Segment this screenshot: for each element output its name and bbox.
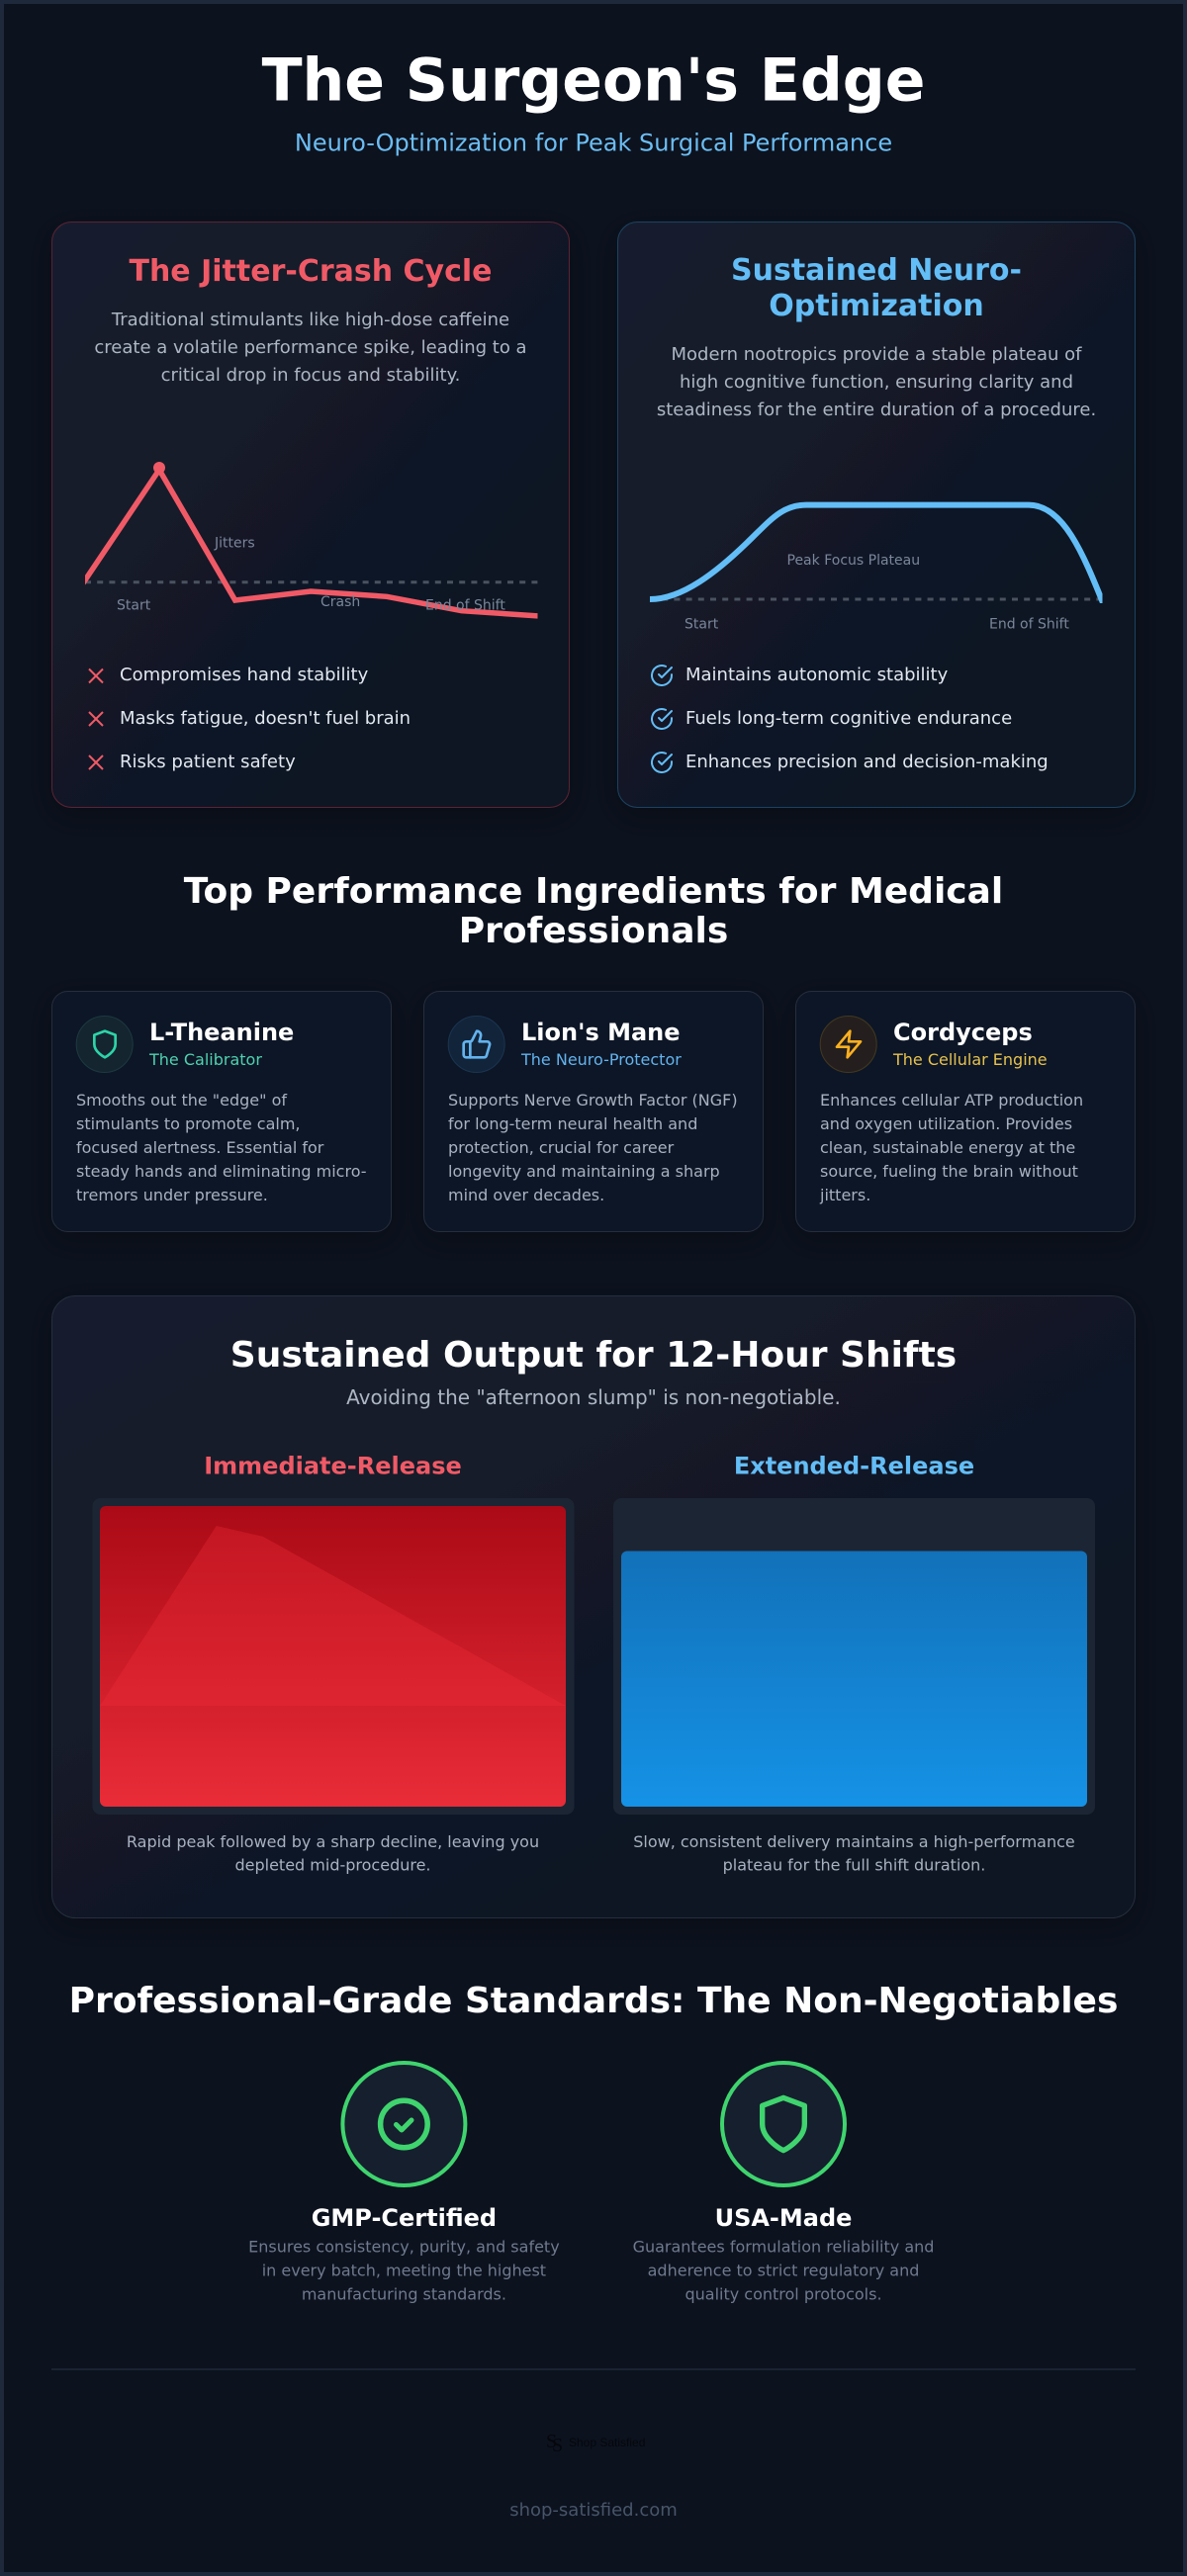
label: the cellular engine: The Cellular Engine xyxy=(892,1050,1048,1069)
panel: jitter-crash cycle xyxy=(51,222,570,807)
chart: sustained plateau curve: End of Shift xyxy=(989,617,1069,633)
label: immediate-release: Immediate-Release xyxy=(204,1452,462,1479)
label: the calibrator: The Calibrator xyxy=(148,1050,262,1069)
column: extended-release xyxy=(613,1452,1095,1875)
text: sustained description xyxy=(657,344,1096,420)
text: Lion's Mane description xyxy=(448,1091,738,1204)
logo: Shop Satisfied xyxy=(546,2431,645,2456)
chart: jitter-crash line: Jitters xyxy=(214,535,255,551)
list: jitter-crash drawbacks: Masks fatigue, doesn't fuel brain xyxy=(120,708,411,729)
text: Cordyceps description: and oxygen utilization. Provides xyxy=(820,1114,1072,1133)
text: Lion's Mane description: longevity and maintaining a sharp xyxy=(448,1162,720,1181)
heading: professional-grade standards: Professional-Grade Standards: The Non-Negotiables xyxy=(69,1981,1118,2021)
caption: extended-release xyxy=(633,1832,1075,1875)
heading: sustained neuro-optimization: Sustained Neuro- xyxy=(731,253,1022,288)
list: sustained benefits: Fuels long-term cognitive endurance xyxy=(685,708,1012,729)
label: Cordyceps: Cordyceps xyxy=(893,1019,1033,1046)
text: jitter-crash description: create a volatile performance spike, leading to a xyxy=(94,337,527,358)
heading: sustained output: Sustained Output for 12-Hour Shifts xyxy=(230,1335,957,1376)
text: L-Theanine description: stimulants to promote calm, xyxy=(76,1114,300,1133)
badge: GMP-Certified xyxy=(248,2063,560,2304)
text: GMP description: Ensures consistency, purity, and safety xyxy=(248,2237,560,2257)
text: L-Theanine description: Smooths out the "edge" of xyxy=(76,1091,287,1110)
text: USA-Made description: Guarantees formulation reliability and xyxy=(633,2237,934,2257)
list: sustained benefits: Maintains autonomic stability xyxy=(685,665,949,685)
heading: jitter-crash cycle: The Jitter-Crash Cycle xyxy=(129,254,493,289)
card: Cordyceps xyxy=(795,991,1136,1232)
logo: Shop Satisfied: S xyxy=(546,2431,557,2452)
icon: shield badge xyxy=(722,2063,845,2185)
list: jitter-crash drawbacks: Risks patient safety xyxy=(120,752,296,772)
chart: jitter-crash line xyxy=(79,462,544,616)
footer url: shop-satisfied.com xyxy=(509,2500,678,2521)
chart: jitter-crash line: Crash xyxy=(320,594,360,610)
text: USA-Made description: quality control protocols. xyxy=(685,2284,882,2304)
panel: sustained output xyxy=(51,1295,1136,1918)
text: sustained description: high cognitive function, ensuring clarity and xyxy=(680,372,1073,393)
icon: shield xyxy=(76,1017,133,1072)
caption: immediate-release: Rapid peak followed by a sharp decline, leaving you xyxy=(127,1832,539,1851)
heading: sustained neuro-optimization xyxy=(731,253,1022,323)
text: L-Theanine description: focused alertness. Essential for xyxy=(76,1138,324,1157)
text: L-Theanine description: tremors under pressure. xyxy=(76,1186,268,1204)
label: Lion's Mane: Lion's Mane xyxy=(521,1019,681,1046)
icon: lightning bolt xyxy=(820,1017,876,1072)
text: Lion's Mane description: Supports Nerve Growth Factor (NGF) xyxy=(448,1091,738,1110)
list: sustained benefits xyxy=(652,665,1049,772)
caption: immediate-release: depleted mid-procedure. xyxy=(234,1855,431,1875)
text: Cordyceps description: clean, sustainable energy at the xyxy=(820,1138,1075,1157)
heading: top performance ingredients: Professionals xyxy=(459,911,728,951)
text: Cordyceps description xyxy=(819,1091,1083,1204)
chart: jitter-crash line: End of Shift xyxy=(425,598,505,614)
icon: thumbs up xyxy=(448,1017,504,1072)
icon: check badge xyxy=(342,2063,465,2185)
caption: extended-release: plateau for the full shift duration. xyxy=(723,1855,985,1875)
panel: sustained neuro-optimization xyxy=(617,222,1136,807)
list: sustained benefits: Enhances precision and decision-making xyxy=(685,752,1049,772)
list: jitter-crash drawbacks xyxy=(89,665,411,772)
label: extended-release: Extended-Release xyxy=(734,1452,974,1479)
text: USA-Made description xyxy=(633,2237,934,2304)
heading: top performance ingredients xyxy=(184,871,1003,951)
heading: sustained neuro-optimization: Optimization xyxy=(769,289,984,323)
text: GMP description xyxy=(248,2237,560,2304)
list: jitter-crash drawbacks: Compromises hand stability xyxy=(120,665,369,685)
label: USA-Made: USA-Made xyxy=(715,2204,852,2232)
heading: top performance ingredients: Top Performance Ingredients for Medical xyxy=(184,871,1003,912)
card: L-Theanine xyxy=(51,991,392,1232)
text: jitter-crash description: Traditional stimulants like high-dose caffeine xyxy=(111,310,509,330)
subheading: afternoon slump: Avoiding the "afternoon slump" is non-negotiable. xyxy=(346,1385,841,1409)
text: Cordyceps description: jitters. xyxy=(819,1186,870,1204)
text: jitter-crash description xyxy=(94,310,527,386)
text: Lion's Mane description: mind over decades. xyxy=(448,1186,604,1204)
card: Lion's Mane xyxy=(423,991,764,1232)
text: USA-Made description: adherence to strict regulatory and xyxy=(648,2261,919,2280)
text: GMP description: manufacturing standards. xyxy=(302,2284,506,2304)
text: L-Theanine description xyxy=(76,1091,367,1204)
text: Lion's Mane description: for long-term neural health and xyxy=(448,1114,697,1133)
text: Cordyceps description: source, fueling the brain without xyxy=(820,1162,1078,1181)
column: immediate-release xyxy=(93,1452,574,1875)
chart: sustained plateau curve: Start xyxy=(685,617,719,633)
chart: extended-release bar xyxy=(613,1498,1095,1815)
subtitle: Neuro-Optimization for Peak Surgical Performance xyxy=(295,129,892,156)
caption: immediate-release xyxy=(127,1832,539,1875)
label: GMP-Certified: GMP-Certified xyxy=(312,2204,497,2232)
chart: jitter-crash line: Start xyxy=(117,598,151,614)
caption: extended-release: Slow, consistent delivery maintains a high-performance xyxy=(633,1832,1075,1851)
logo: Shop Satisfied: Shop Satisfied xyxy=(569,2436,645,2449)
text: sustained description: steadiness for the entire duration of a procedure. xyxy=(657,400,1096,420)
text: GMP description: in every batch, meeting the highest xyxy=(262,2261,546,2280)
chart: sustained plateau curve: Peak Focus Plateau xyxy=(787,553,920,569)
title: The Surgeon's Edge xyxy=(262,45,925,115)
text: jitter-crash description: critical drop in focus and stability. xyxy=(161,365,460,386)
chart: sustained plateau curve xyxy=(650,505,1104,633)
text: sustained description: Modern nootropics provide a stable plateau of xyxy=(671,344,1082,365)
text: Cordyceps description: Enhances cellular ATP production xyxy=(820,1091,1083,1110)
logo: Shop Satisfied: S xyxy=(552,2435,563,2456)
chart: immediate-release bar xyxy=(93,1498,574,1815)
badge: USA-Made xyxy=(633,2063,934,2304)
label: the neuro-protector: The Neuro-Protector xyxy=(520,1050,682,1069)
text: L-Theanine description: steady hands and eliminating micro- xyxy=(76,1162,367,1181)
label: L-Theanine: L-Theanine xyxy=(149,1019,294,1046)
text: Lion's Mane description: protection, crucial for career xyxy=(448,1138,675,1157)
